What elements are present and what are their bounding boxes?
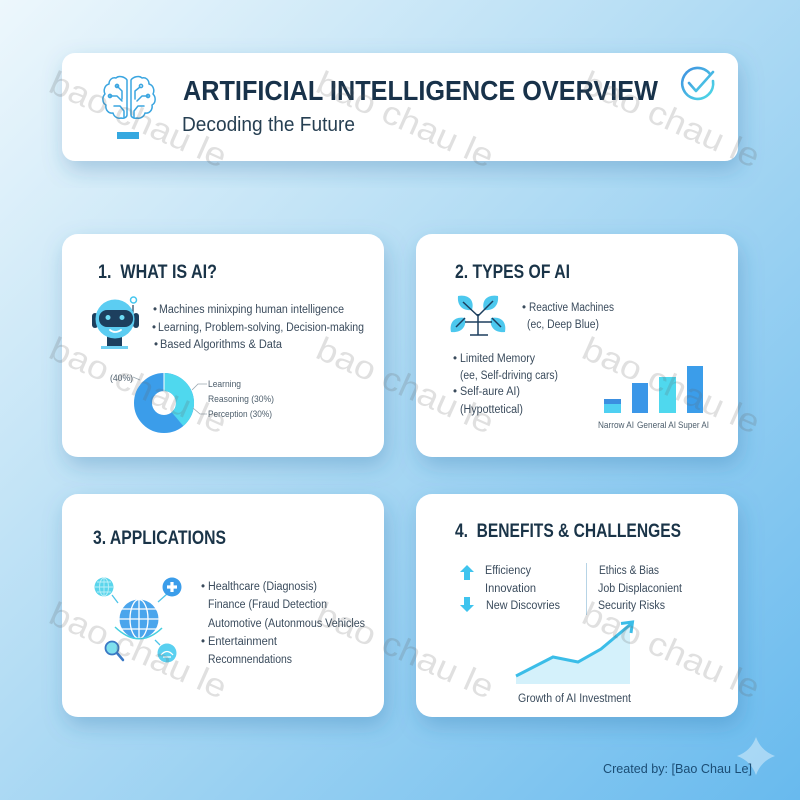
benefits list: Innovation bbox=[485, 583, 536, 595]
icon: down arrow bbox=[460, 597, 474, 612]
bullet list: • bbox=[153, 304, 157, 316]
bullet list: • bbox=[201, 636, 205, 648]
watermarks: bao chau le bbox=[577, 330, 766, 441]
challenges list: Security Risks bbox=[598, 600, 665, 612]
text: memory and self-aware: Limited Memory bbox=[460, 353, 535, 365]
watermarks: bao chau le bbox=[577, 64, 766, 175]
bullet list: Learning, Problem-solving, Decision-making bbox=[158, 322, 364, 334]
text: memory and self-aware: (ee, Self-driving cars) bbox=[460, 370, 558, 382]
heading: types of AI: 2. TYPES OF AI bbox=[455, 262, 570, 283]
watermarks bbox=[44, 64, 766, 706]
bullet list: Healthcare (Diagnosis) bbox=[208, 581, 317, 593]
text: memory and self-aware: (Hypottetical) bbox=[460, 404, 523, 416]
benefits list: Efficiency bbox=[485, 565, 531, 577]
panel: what is AI bbox=[62, 234, 384, 457]
text: memory and self-aware: • bbox=[453, 353, 457, 365]
panel: header bbox=[62, 53, 738, 161]
donut labels: (40%) bbox=[110, 373, 133, 384]
watermarks: bao chau le bbox=[311, 64, 500, 175]
watermarks: bao chau le bbox=[44, 64, 233, 175]
credit: Created by: [Bao Chau Le] bbox=[603, 761, 752, 776]
challenges list: Job Displaconient bbox=[598, 583, 683, 595]
bar chart: Narrow AI bbox=[598, 420, 634, 431]
bullet list: Finance (Fraud Detection bbox=[208, 599, 327, 611]
text: reactive machines bbox=[522, 302, 614, 331]
icon: circuit brain bbox=[103, 77, 155, 139]
heading: what is AI: 1. WHAT IS AI? bbox=[98, 262, 217, 283]
icon: brain base bbox=[117, 132, 139, 139]
subtitle: Decoding the Future bbox=[182, 114, 355, 136]
text: reactive machines: (ec, Deep Blue) bbox=[527, 319, 599, 331]
challenges list bbox=[598, 565, 683, 612]
watermarks: bao chau le bbox=[311, 330, 500, 441]
watermarks: bao chau le bbox=[311, 595, 500, 706]
watermarks: bao chau le bbox=[577, 595, 766, 706]
bullet list: • bbox=[154, 339, 158, 351]
bullet list: Automotive (Autonmous Vehicles bbox=[208, 618, 365, 630]
donut labels: Perception (30%) bbox=[208, 409, 272, 420]
bar chart bbox=[598, 366, 709, 431]
area chart bbox=[516, 622, 632, 684]
bullet list: Recomnendations bbox=[208, 654, 292, 666]
panel: benefits and challenges bbox=[416, 494, 738, 717]
bullet list: • bbox=[201, 581, 205, 593]
bar chart: General AI bbox=[637, 420, 676, 431]
text: memory and self-aware bbox=[453, 353, 558, 416]
icon: sparkle bbox=[737, 737, 775, 775]
bullet list bbox=[201, 581, 365, 666]
text: memory and self-aware: • bbox=[453, 386, 457, 398]
donut labels: Reasoning (30%) bbox=[208, 394, 274, 405]
donut chart bbox=[143, 373, 194, 426]
bar chart: Super AI bbox=[678, 420, 709, 431]
watermarks: bao chau le bbox=[44, 330, 233, 441]
heading: benefits and challenges: 4. BENEFITS & CHALLENGES bbox=[455, 521, 681, 542]
benefits list: New Discovries bbox=[486, 600, 560, 612]
icon: branching tree bbox=[451, 296, 505, 335]
text: reactive machines: • bbox=[522, 302, 526, 314]
chart caption: Growth of AI Investment bbox=[518, 693, 632, 705]
icon: up arrow bbox=[460, 565, 474, 580]
title: ARTIFICIAL INTELLIGENCE OVERVIEW bbox=[183, 75, 659, 106]
watermarks: bao chau le bbox=[44, 595, 233, 706]
heading: applications: 3. APPLICATIONS bbox=[93, 528, 226, 549]
icon: globe network bbox=[94, 578, 182, 662]
bullet list: Entertainment bbox=[208, 636, 278, 648]
donut labels bbox=[110, 373, 274, 420]
panel: applications bbox=[62, 494, 384, 717]
bullet list: Machines minixping human intelligence bbox=[159, 304, 344, 316]
benefits list bbox=[485, 565, 560, 612]
text: memory and self-aware: Self-aure AI) bbox=[460, 386, 520, 398]
challenges list: Ethics & Bias bbox=[599, 565, 659, 577]
bullet list: • bbox=[152, 322, 156, 334]
bullet list bbox=[152, 304, 364, 351]
icon: check badge bbox=[682, 68, 713, 99]
bullet list: Based Algorithms & Data bbox=[160, 339, 283, 351]
icon: robot bbox=[92, 297, 139, 349]
donut labels: Learning bbox=[208, 379, 241, 390]
text: reactive machines: Reactive Machines bbox=[529, 302, 614, 314]
panel: types of AI bbox=[416, 234, 738, 457]
